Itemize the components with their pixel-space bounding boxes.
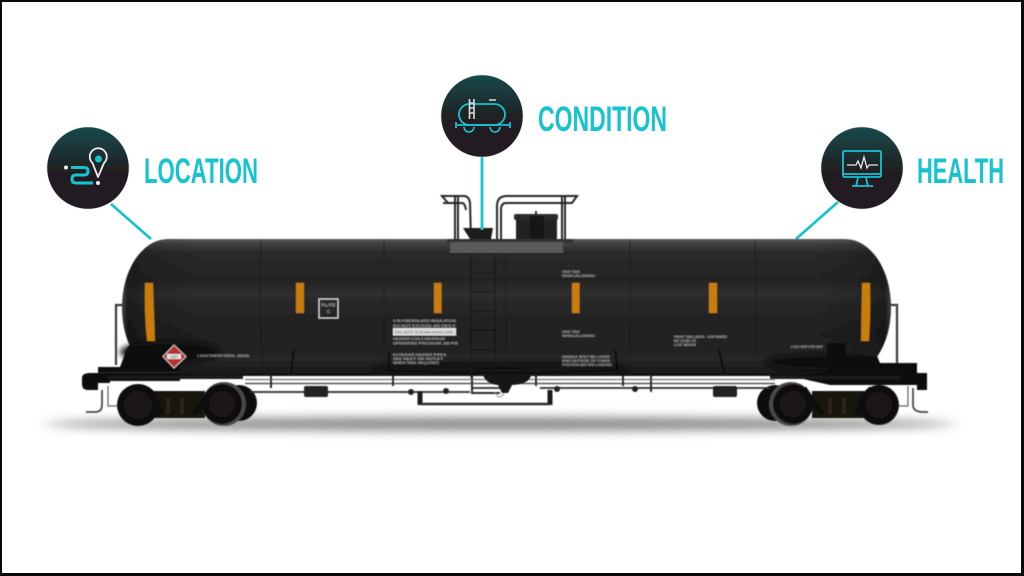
plate C stencil: C — [327, 309, 331, 314]
ladder — [471, 250, 495, 378]
right end grab rail — [888, 305, 897, 366]
stencil: sample notice: AND OUTSIDE OF CHAIN — [562, 359, 610, 363]
stencil: sample notice: POSITION BEFORE LOADING — [562, 363, 612, 367]
heading: condition: CONDITION — [538, 100, 667, 139]
stencil: insulation notice — [393, 319, 458, 365]
stencil: insulation notice: DO NOT STEAM RAILCAR — [395, 330, 454, 334]
walkway platform — [447, 239, 573, 254]
stencil: insulation notice: HEATER COILS MAXIMUM — [393, 337, 445, 341]
top platform railings — [442, 196, 577, 239]
health badge — [821, 127, 903, 209]
heading: location: LOCATION — [144, 152, 258, 191]
location badge — [47, 127, 129, 209]
left end chassis — [82, 345, 243, 412]
hazmat diamond — [163, 345, 186, 368]
ground shadow — [45, 417, 955, 431]
left truck — [117, 382, 246, 426]
belly outlet — [483, 375, 531, 393]
top valve housing — [463, 228, 493, 239]
under-frame piping — [245, 376, 775, 405]
stencil: vent notice upper: WHEN UNLOADING — [562, 274, 595, 278]
condition badge — [441, 75, 523, 157]
connector: location — [111, 204, 151, 239]
stencil: insulation notice: 4 IN FIBERGLASS INSULATION — [393, 319, 456, 323]
stencil: insulation notice: EXTERIOR HEATER PIPES — [393, 353, 447, 357]
stencil: small line left: 1 INCH TEMPER THERM - 8500EB — [197, 354, 250, 358]
stencil: sample notice: HANDLE BOLT BE LOOSE — [562, 355, 611, 359]
tank end shading — [122, 239, 891, 376]
icon: tank car — [456, 99, 510, 132]
stencil: vent notice upper — [562, 270, 595, 278]
stencil: small line right: LOCO VENT FOR VENT — [791, 345, 824, 349]
stencil: vent notice lower: WHEN UNLOADING — [562, 334, 595, 338]
stencil: insulation notice: WHEN TANK REQUIRED — [393, 361, 439, 365]
stencil: tank specification: PAINT WILLIAMS - KAYWARD — [674, 335, 727, 339]
top manway dome — [514, 211, 558, 239]
stencil: vent notice lower: VENT TANK — [562, 330, 581, 334]
plate C stencil — [319, 299, 338, 318]
stencil: insulation notice: SEE INLET OR OUTLET — [393, 357, 444, 361]
tank car illustration — [82, 196, 928, 426]
tank body — [122, 239, 891, 376]
icon: monitor with pulse — [843, 151, 881, 186]
stencil: insulation notice: OPERATING PRESSURE 150 PSI — [393, 342, 458, 346]
tank seams — [260, 240, 756, 376]
stencil: tank specification: LGT 65000 — [674, 343, 696, 347]
stencil: insulation notice: DO NOT EXCEED 400 DEG F — [393, 324, 457, 328]
stencil: tank specification — [674, 335, 727, 347]
right truck — [769, 382, 899, 426]
plate C stencil: PLATE — [322, 302, 335, 308]
rear wheels — [221, 385, 257, 421]
hazmat diamond: 1267 — [170, 355, 178, 359]
tank lower blotches — [120, 341, 875, 372]
orange placards — [145, 283, 870, 341]
stencil: sample notice — [562, 355, 612, 367]
right end chassis — [770, 343, 928, 412]
connector: condition — [481, 156, 483, 230]
stencil: vent notice upper: VENT TANK — [562, 270, 581, 274]
icon: route and map pin — [64, 148, 107, 185]
stencil: tank specification: BD 11282-03 — [674, 339, 696, 343]
stencil: vent notice lower — [562, 330, 595, 338]
hanger marks on tank — [291, 350, 724, 373]
left end grab rail — [116, 305, 125, 365]
reservoir canisters — [304, 386, 737, 397]
connector: health — [796, 202, 838, 239]
